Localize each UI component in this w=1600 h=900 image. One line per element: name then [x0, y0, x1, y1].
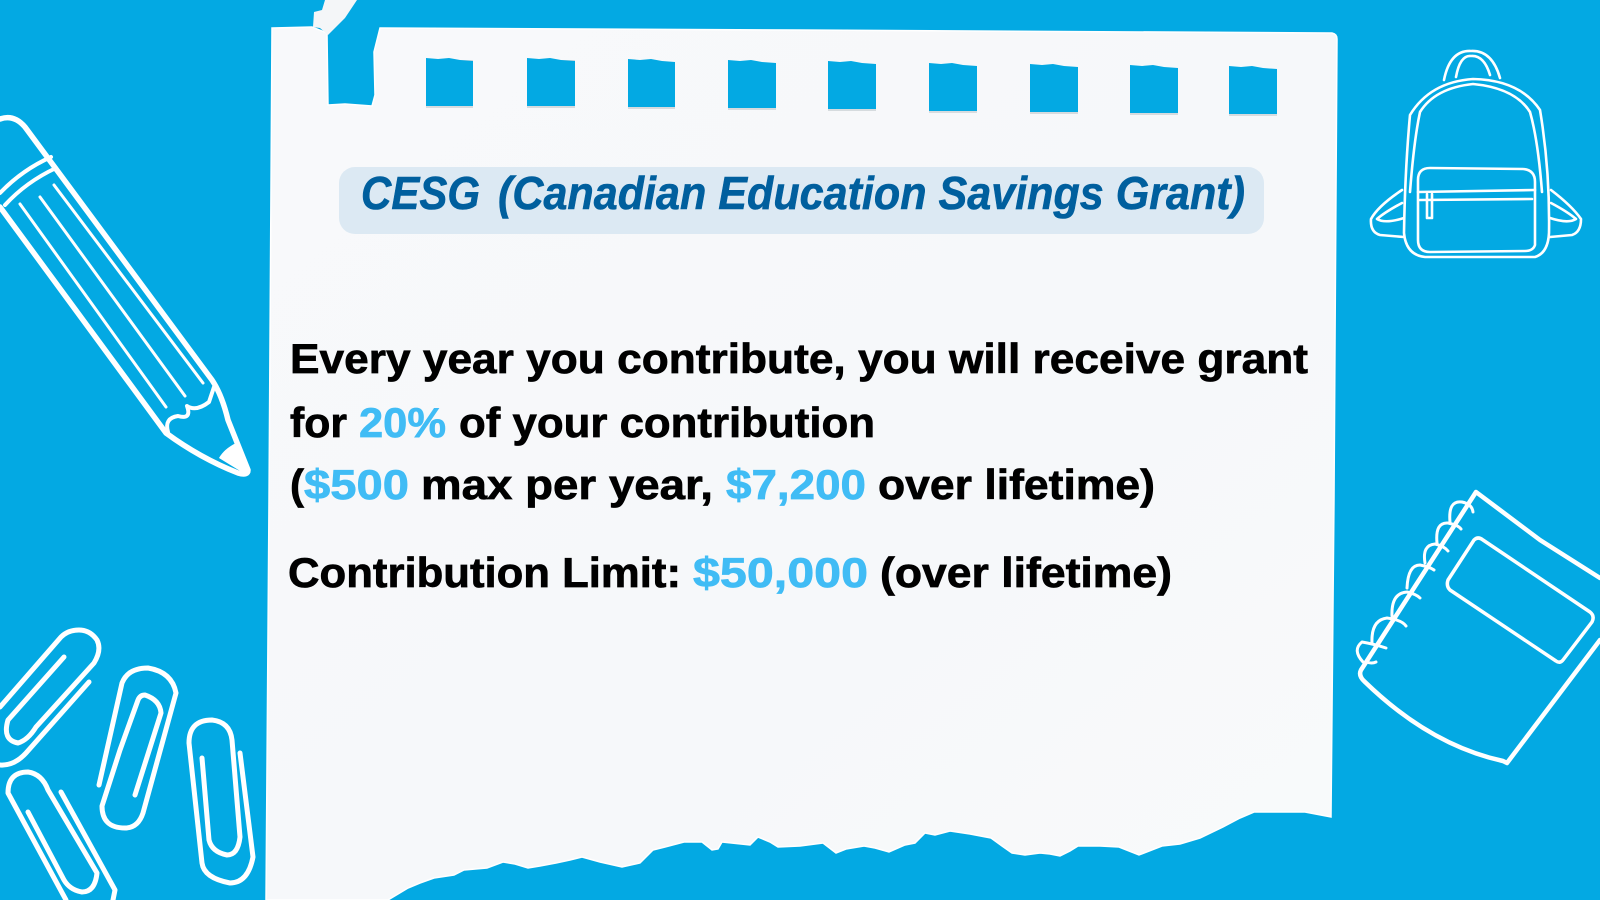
title banner: CESG [361, 167, 480, 219]
paperclip 2 [99, 668, 176, 828]
paperclip 3 [189, 720, 253, 883]
text block: grant explanation: max per year, [421, 461, 713, 508]
text block: contribution limit: (over lifetime) [880, 549, 1172, 596]
paperclip 1 [0, 630, 99, 765]
text block: grant explanation: Every year you contribute, you will receive grant [290, 335, 1308, 382]
text block: grant explanation: $7,200 [726, 461, 866, 508]
binder holes [426, 58, 1277, 116]
text block: grant explanation: ( [290, 461, 304, 508]
panel: torn notebook paper [266, 0, 1337, 900]
text block: contribution limit [288, 549, 1172, 596]
text block: grant explanation: over lifetime) [878, 461, 1155, 508]
text block: contribution limit: Contribution Limit: [288, 549, 681, 596]
text block: grant explanation: for [290, 399, 347, 446]
text block: grant explanation: $500 [304, 461, 409, 508]
title banner: (Canadian Education Savings Grant) [498, 167, 1245, 219]
text block: contribution limit: $50,000 [693, 549, 868, 596]
torn flap [313, 0, 357, 35]
icon: paperclips [0, 630, 253, 900]
icon: pencil [0, 118, 249, 474]
text block: grant explanation: of your contribution [459, 399, 875, 446]
paperclip 4 [8, 772, 115, 900]
text block: grant explanation: 20% [359, 399, 446, 446]
icon: spiral notebook [1357, 492, 1600, 763]
title banner [339, 167, 1264, 234]
icon: backpack [1371, 51, 1581, 257]
text block: grant explanation [290, 335, 1308, 508]
